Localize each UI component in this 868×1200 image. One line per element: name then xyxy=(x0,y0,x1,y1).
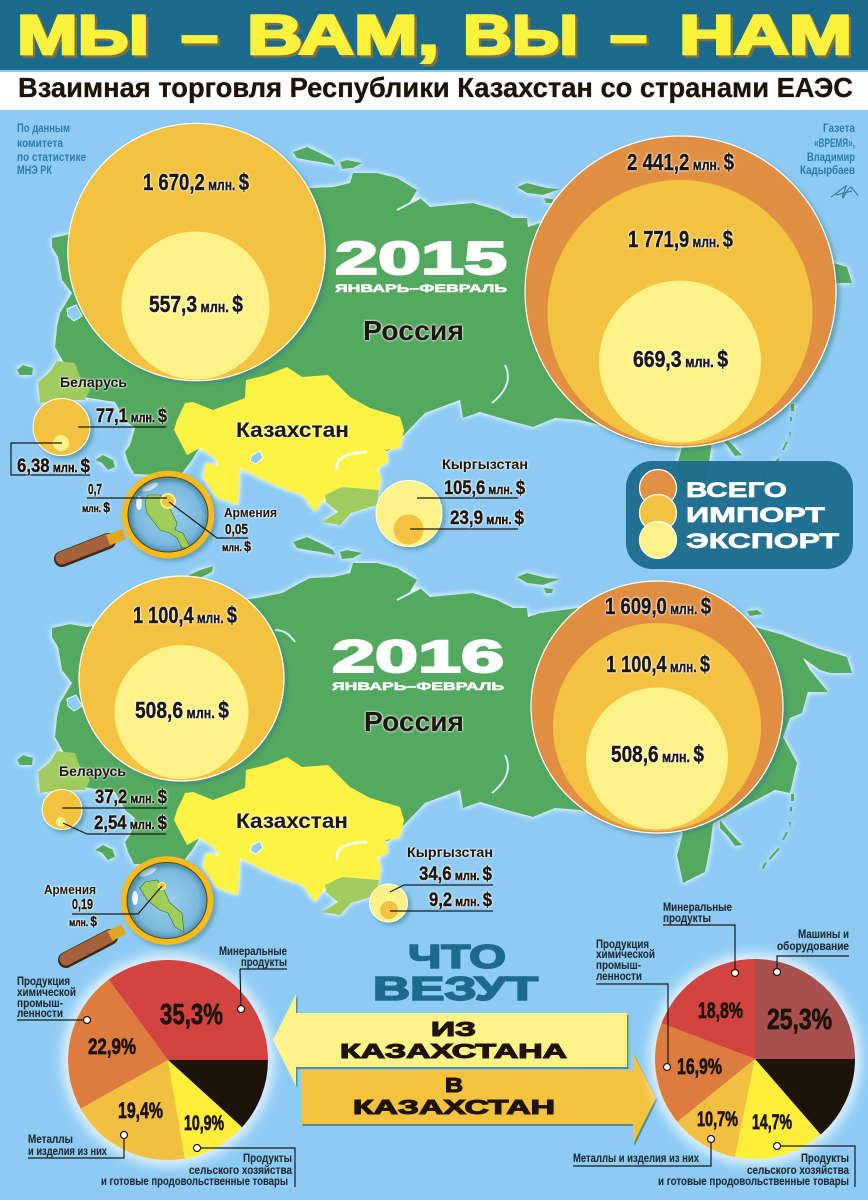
magnifier: Armenia 2016: 0,19 xyxy=(72,896,93,913)
pie chart: exports from Kazakhstan: Металлы xyxy=(28,1132,73,1146)
title xyxy=(17,3,852,66)
pie chart: imports to Kazakhstan: 18,8% xyxy=(698,998,743,1023)
arrow: from Kazakhstan: ИЗ xyxy=(431,1019,476,1041)
author credit: Кадырбаев xyxy=(800,163,855,177)
arrow: from Kazakhstan xyxy=(273,994,627,1086)
pie chart: imports to Kazakhstan: сельского хозяйства xyxy=(747,1163,849,1177)
bubble: Russia totals 2016 right xyxy=(531,581,783,833)
pie chart: exports from Kazakhstan: 22,9% xyxy=(88,1034,136,1059)
author credit: Владимир xyxy=(807,150,855,164)
2015 year heading: ЯНВАРЬ–ФЕВРАЛЬ xyxy=(335,283,507,295)
2016 year heading: ЯНВАРЬ–ФЕВРАЛЬ xyxy=(332,681,504,693)
arrow: into Kazakhstan: В xyxy=(445,1075,463,1097)
2016 year heading xyxy=(332,631,504,693)
bubble: Russia totals 2016 right: 1 609,0 млн. $ xyxy=(605,593,711,619)
title: – xyxy=(610,3,647,66)
Kyrgyzstan 2015 xyxy=(376,457,528,546)
Kyrgyzstan 2016: Кыргызстан xyxy=(407,845,493,860)
Belarus 2016 xyxy=(42,763,167,834)
arrow: from Kazakhstan: КАЗАХСТАНА xyxy=(340,1041,567,1063)
title: – xyxy=(181,3,218,66)
Belarus 2015 xyxy=(11,374,167,477)
slice: metals xyxy=(677,1059,755,1157)
pie chart: exports from Kazakhstan: 35,3% xyxy=(160,999,223,1031)
subtitle strip: Взаимная торговля Республики Казахстан со странами ЕАЭС xyxy=(18,72,853,103)
slice: other (black) xyxy=(755,1059,855,1134)
pie chart: exports from Kazakhstan: Продукты xyxy=(243,1151,292,1165)
magnifier: Armenia 2015: 0,7 xyxy=(88,481,102,498)
pie chart: imports to Kazakhstan: 25,3% xyxy=(767,1004,832,1036)
2015 year heading xyxy=(335,232,507,295)
author credit: Газета xyxy=(823,121,855,135)
source note: по статистике xyxy=(17,150,86,164)
pie chart: imports to Kazakhstan: оборудование xyxy=(777,939,849,953)
Belarus 2016: 2,54 млн. $ xyxy=(94,813,167,834)
label: Kazakhstan 2016: Казахстан xyxy=(236,810,348,833)
map: 2016 xyxy=(17,537,852,915)
Kyrgyzstan 2016: 34,6 млн. $ xyxy=(419,864,492,885)
magnifier: Armenia 2015: млн. $ xyxy=(222,538,251,554)
pie chart: imports to Kazakhstan: 16,9% xyxy=(677,1054,722,1079)
Belarus 2016: Беларусь xyxy=(59,763,126,779)
slice: chemical products xyxy=(68,980,168,1109)
pie chart: imports to Kazakhstan: 10,7% xyxy=(697,1108,738,1131)
magnifier: Armenia 2015: млн. $ xyxy=(82,499,110,515)
slice: mineral products xyxy=(662,959,755,1059)
bubble: Russia imports/exports 2016 left xyxy=(79,576,284,781)
heading: what is shipped: ЧТО xyxy=(408,938,506,975)
2016 year heading: 2016 xyxy=(332,631,504,682)
pie chart: imports to Kazakhstan: 14,7% xyxy=(752,1111,792,1134)
Belarus 2015: 6,38 млн. $ xyxy=(17,456,90,477)
bubble: Russia imports/exports 2016 left: 1 100,4 млн. $ xyxy=(133,602,237,628)
pie chart: imports to Kazakhstan: промыш- xyxy=(596,958,641,972)
magnifier: Armenia 2015: Армения xyxy=(224,506,277,520)
bubble: Russia totals 2015 right xyxy=(525,136,836,447)
slice: metals xyxy=(81,1060,185,1160)
bubble: Russia totals 2015 right: 669,3 млн. $ xyxy=(633,346,728,372)
bubble: Russia imports/exports 2015 left: 1 670,2 млн. $ xyxy=(143,169,249,195)
pie chart: exports from Kazakhstan: промыш- xyxy=(17,996,63,1010)
Kyrgyzstan 2016: 9,2 млн. $ xyxy=(429,890,492,911)
arrow: into Kazakhstan xyxy=(301,1053,656,1144)
Belarus 2015: 77,1 млн. $ xyxy=(96,406,167,427)
bubble: Russia imports/exports 2015 left xyxy=(68,123,325,381)
pie chart: exports from Kazakhstan: 10,9% xyxy=(184,1112,224,1135)
pie chart: imports to Kazakhstan: ленности xyxy=(596,969,642,983)
source note: По данным xyxy=(17,121,70,135)
pie chart: imports to Kazakhstan: химической xyxy=(596,947,655,961)
pie chart: imports to Kazakhstan: Минеральные xyxy=(663,900,732,914)
magnifier: Armenia 2015 xyxy=(62,474,277,559)
Belarus 2015: Беларусь xyxy=(60,374,127,390)
bubble: Russia totals 2015 right: 2 441,2 млн. $ xyxy=(627,149,734,175)
pie chart: exports from Kazakhstan: 19,4% xyxy=(118,1098,163,1123)
magnifier: Armenia 2016 xyxy=(44,860,210,960)
slice: food products xyxy=(168,1060,242,1159)
pie chart: exports from Kazakhstan xyxy=(17,944,295,1188)
bubble: Russia imports/exports 2015 left: 557,3 млн. $ xyxy=(149,291,243,317)
Kyrgyzstan 2015: Кыргызстан xyxy=(442,457,528,472)
pie chart: imports to Kazakhstan: продукты xyxy=(663,911,711,925)
source note xyxy=(17,121,86,177)
magnifier: Armenia 2016: Армения xyxy=(44,883,96,897)
label: Kazakhstan 2015: Казахстан xyxy=(236,419,349,442)
slice: machinery xyxy=(755,959,855,1059)
Kyrgyzstan 2015: 105,6 млн. $ xyxy=(444,478,525,499)
Belarus 2016: 37,2 млн. $ xyxy=(95,787,167,808)
header banner xyxy=(0,0,868,70)
pie chart: exports from Kazakhstan: Продукция xyxy=(17,974,70,988)
legend: ЭКСПОРТ xyxy=(686,530,839,553)
pie chart: exports from Kazakhstan: и готовые продовольственные товары xyxy=(101,1174,288,1188)
source note: МНЭ РК xyxy=(17,163,53,177)
2015 year heading: 2015 xyxy=(335,232,507,284)
bubble: Russia totals 2016 right: 1 100,4 млн. $ xyxy=(606,651,710,677)
heading: what is shipped xyxy=(373,938,538,1007)
legend: ВСЕГО xyxy=(686,479,787,502)
slice: other (black) xyxy=(168,1060,268,1127)
bubble: Russia totals 2016 right: 508,6 млн. $ xyxy=(611,741,704,767)
Kyrgyzstan 2016 xyxy=(370,845,493,922)
Kyrgyzstan 2015: 23,9 млн. $ xyxy=(450,508,524,529)
author credit xyxy=(800,121,858,198)
slice: food products xyxy=(735,1059,821,1159)
legend: ИМПОРТ xyxy=(686,504,825,527)
pie chart: imports to Kazakhstan: Продукты xyxy=(801,1151,849,1165)
pie chart: exports from Kazakhstan: химической xyxy=(17,985,76,999)
pie chart: exports from Kazakhstan: ленности xyxy=(17,1006,63,1020)
bubble: Russia imports/exports 2016 left: 508,6 млн. $ xyxy=(135,697,229,723)
magnifier: Armenia 2015: 0,05 xyxy=(225,521,248,538)
heading: what is shipped: ВЕЗУТ xyxy=(373,970,538,1007)
pie chart: imports to Kazakhstan: Машины и xyxy=(798,927,849,941)
slice: mineral products xyxy=(109,960,268,1060)
label: Russia 2016: Россия xyxy=(364,706,464,737)
title: ВАМ, xyxy=(247,3,439,66)
title: МЫ xyxy=(17,3,149,66)
pie chart: exports from Kazakhstan: сельского хозяйства xyxy=(189,1163,292,1177)
label: Russia 2015: Россия xyxy=(363,315,464,346)
legend xyxy=(626,461,853,569)
magnifier: Armenia 2016: млн. $ xyxy=(69,913,97,929)
source note: комитета xyxy=(17,136,63,150)
title: НАМ xyxy=(679,3,852,66)
pie chart: imports to Kazakhstan: Металлы и изделия из них xyxy=(573,1151,699,1165)
pie chart: exports from Kazakhstan: и изделия из них xyxy=(28,1144,107,1158)
pie chart: exports from Kazakhstan: Минеральные xyxy=(219,944,287,958)
pie chart: exports from Kazakhstan: продукты xyxy=(241,955,287,969)
bubble: Russia totals 2015 right: 1 771,9 млн. $ xyxy=(628,226,733,252)
pie chart: imports to Kazakhstan xyxy=(573,900,861,1188)
title: ВЫ xyxy=(463,3,578,66)
arrow: into Kazakhstan: КАЗАХСТАН xyxy=(353,1097,555,1119)
map: 2015 xyxy=(17,147,852,525)
pie chart: imports to Kazakhstan: Продукция xyxy=(596,937,649,951)
slice: chemical products xyxy=(655,1023,755,1122)
